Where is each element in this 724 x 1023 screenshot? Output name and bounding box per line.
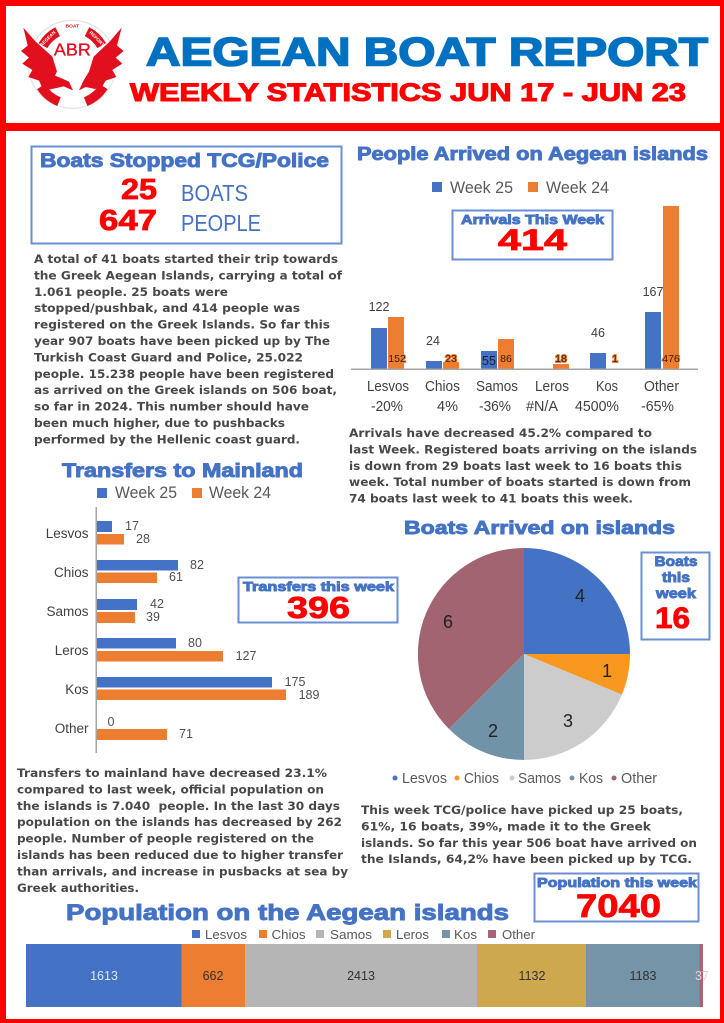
bar chart: people arrived: Samos [476, 379, 518, 395]
heading: population: Population on the Aegean islands [66, 900, 509, 925]
text block: trip summary: the Greek Aegean Islands, carrying a total of [34, 268, 343, 282]
legend [97, 484, 271, 502]
legend: Other [502, 928, 535, 942]
bar chart: transfers: 127 [236, 649, 256, 663]
icon: ABR logo [21, 20, 124, 108]
bar chart: transfers: 80 [188, 636, 202, 650]
legend: Kos [454, 928, 477, 942]
callout: boats this week: week [655, 585, 696, 601]
bar chart: people arrived [351, 178, 698, 415]
bar chart: transfers: Kos [65, 682, 89, 697]
bar chart: people arrived: 86 [500, 353, 512, 365]
stacked bar: population: 662 [203, 969, 223, 983]
bar chart: people arrived: -65% [641, 399, 674, 415]
text block: trip summary [34, 252, 343, 446]
subtitle: weekly statistics: WEEKLY STATISTICS JUN 17 - JUN 23 [130, 79, 686, 107]
callout: arrivals this week: Arrivals This Week [461, 212, 605, 227]
legend: Leros [396, 928, 429, 942]
bar chart: people arrived: Kos [596, 379, 618, 395]
callout: transfers this week [238, 578, 398, 625]
bar chart: transfers: 82 [190, 558, 204, 572]
text block: transfers summary: Greek authorities. [17, 881, 139, 895]
callout: transfers this week: Transfers this week [243, 579, 395, 594]
bar chart: people arrived: 23 [445, 353, 457, 365]
text block: pickups summary [361, 803, 697, 866]
bar chart: people arrived: 55 [482, 354, 496, 368]
text block: trip summary: as arrived on the Greek islands on 506 boat, [34, 383, 337, 397]
bar chart: transfers: 189 [299, 688, 319, 702]
bar chart: transfers: 42 [150, 597, 164, 611]
callout: transfers this week: 396 [287, 590, 350, 625]
text block: arrivals summary [349, 426, 697, 506]
icon: ABR logo: BOAT [65, 24, 79, 30]
legend: Chios [272, 928, 306, 942]
text block: transfers summary: compared to last week, official population on [17, 782, 324, 796]
text block: transfers summary: islands has been reduced due to higher transfer [17, 848, 343, 862]
pie chart: boats arrived: 1 [602, 661, 612, 681]
text block: transfers summary: than arrivals, and increase in pusbacks at sea by [17, 864, 349, 878]
legend [432, 178, 609, 197]
bar chart: people arrived: 4500% [575, 399, 619, 415]
bar chart: people arrived: Chios [425, 379, 460, 395]
legend [392, 771, 657, 787]
text block: arrivals summary: week. Total number of boats started is down from [349, 475, 691, 489]
bar chart: people arrived: -36% [479, 399, 511, 415]
legend: Week 25 [450, 178, 513, 197]
bar chart: transfers: 39 [146, 610, 160, 624]
stat: 25 boats: 25 [121, 174, 157, 206]
stacked bar: population: 1183 [630, 969, 656, 983]
bar chart: people arrived: 18 [555, 353, 567, 365]
stat: 25 boats [121, 174, 248, 206]
pie chart: boats arrived [392, 548, 657, 787]
bar chart: people arrived: 152 [388, 353, 406, 365]
icon: ABR logo: REPORT [88, 30, 106, 47]
text block: trip summary: year 907 boats have been picked up by The [34, 334, 330, 348]
bar chart: transfers: Leros [55, 643, 89, 658]
text block: trip summary: so far in 2024. This number should have [34, 400, 309, 414]
legend: Chios [464, 771, 499, 787]
callout: population this week [534, 874, 698, 924]
stacked bar: population [26, 928, 709, 1007]
bar chart: transfers [46, 484, 319, 753]
bar chart: people arrived: 122 [369, 300, 389, 314]
text block: trip summary: Turkish Coast Guard and Police, 25.022 [34, 350, 303, 364]
text block: trip summary: stopped/pushbak, and 414 people was [34, 301, 300, 315]
bar chart: transfers: 28 [136, 532, 150, 546]
callout: boats this week: 16 [655, 602, 690, 635]
heading: boats stopped: Boats Stopped TCG/Police [40, 151, 329, 172]
text block: arrivals summary: 74 boats last week to 41 boats this week. [349, 492, 633, 506]
bar chart: transfers: Other [55, 721, 89, 736]
text block: transfers summary: the islands is 7.040 people. In the last 30 days [17, 799, 340, 813]
bar chart: people arrived: #N/A [526, 399, 558, 415]
bar chart: transfers: 71 [179, 727, 193, 741]
pie chart: boats arrived: 4 [575, 586, 585, 606]
pie chart: boats arrived: 3 [563, 711, 573, 731]
bar chart: people arrived: 167 [643, 285, 663, 299]
bar chart: transfers: Chios [54, 565, 89, 580]
bar chart: people arrived: Other [644, 379, 679, 395]
bar chart: people arrived: Leros [535, 379, 569, 395]
legend: Samos [330, 928, 372, 942]
stacked bar: population: 37 [695, 969, 709, 983]
icon: ABR logo: AEGEAN [39, 29, 57, 47]
text block: pickups summary: islands. So far this year 506 boat have arrived on [361, 836, 697, 850]
heading: transfers to mainland: Transfers to Mainland [62, 461, 303, 482]
callout: arrivals this week [452, 210, 612, 260]
bar chart: people arrived: Lesvos [367, 379, 409, 395]
text block: trip summary: registered on the Greek Islands. So far this [34, 318, 330, 332]
bar chart: people arrived: -20% [371, 399, 403, 415]
callout: boats this week: Boats [654, 553, 698, 569]
bar chart: people arrived: 24 [426, 334, 440, 348]
text block: transfers summary: Transfers to mainland have decreased 23.1% [17, 766, 328, 780]
text block: arrivals summary: Arrivals have decreased 45.2% compared to [349, 426, 652, 440]
legend: Week 24 [209, 484, 271, 502]
legend: Kos [579, 771, 603, 787]
heading: boats arrived: Boats Arrived on islands [404, 517, 675, 538]
title: AEGEAN BOAT REPORT [146, 30, 708, 74]
bar chart: transfers: 61 [169, 570, 183, 584]
stat: 647 people: 647 [99, 205, 157, 237]
legend: Samos [518, 771, 561, 787]
pie chart: boats arrived: 6 [443, 612, 453, 632]
bar chart: transfers: 17 [125, 519, 139, 533]
legend: Week 24 [546, 178, 609, 197]
panel: boats stopped [32, 146, 342, 244]
stacked bar: population: 1613 [90, 969, 118, 983]
text block: pickups summary: 61%, 16 boats, 39%, made it to the Greek [361, 819, 651, 833]
pie chart: boats arrived: 2 [488, 721, 498, 741]
callout: boats this week: this [662, 569, 690, 585]
icon: ABR logo: ABR [54, 40, 91, 60]
heading: people arrived: People Arrived on Aegean islands [357, 144, 708, 164]
legend [192, 928, 535, 942]
text block: trip summary: people. 15.238 people have been registered [34, 367, 334, 381]
legend: Lesvos [205, 928, 247, 942]
text block: arrivals summary: is down from 29 boats last week to 16 boats this [349, 459, 682, 473]
stacked bar: population: 1132 [519, 969, 545, 983]
bar chart: people arrived: 46 [591, 326, 605, 340]
bar chart: people arrived: 4% [437, 399, 458, 415]
text block: pickups summary: This week TCG/police have picked up 25 boats, [361, 803, 683, 817]
bar chart: transfers: 0 [108, 715, 115, 729]
text block: transfers summary [17, 766, 349, 895]
bar chart: transfers: Samos [46, 604, 89, 619]
bar chart: people arrived: 476 [662, 353, 680, 365]
text block: transfers summary: population on the islands has decreased by 262 [17, 815, 342, 829]
callout: arrivals this week: 414 [498, 224, 567, 257]
text block: arrivals summary: last Week. Registered boats arriving on the islands [349, 442, 697, 456]
bar chart: people arrived: 1 [612, 353, 618, 365]
legend: Week 25 [115, 484, 177, 502]
text block: trip summary: been much higher, due to pushbacks [34, 416, 285, 430]
callout: population this week: 7040 [576, 888, 661, 924]
text block: pickups summary: the Islands, 64,2% have been picked up by TCG. [361, 852, 692, 866]
stat: 25 boats: BOATS [181, 180, 248, 206]
text block: trip summary: performed by the Hellenic coast guard. [34, 432, 300, 446]
callout: boats this week [642, 552, 710, 640]
stacked bar: population: 2413 [347, 969, 375, 983]
text block: trip summary: A total of 41 boats started their trip towards [34, 252, 338, 266]
bar chart: transfers: Lesvos [46, 526, 89, 541]
text block: transfers summary: people. Number of people registered on the [17, 832, 314, 846]
legend: Other [621, 771, 657, 787]
callout: population this week: Population this week [537, 875, 698, 890]
legend: Lesvos [402, 771, 447, 787]
stat: 647 people [99, 205, 261, 237]
text block: trip summary: 1.061 people. 25 boats were [34, 285, 228, 299]
bar chart: transfers: 175 [285, 675, 305, 689]
stat: 647 people: PEOPLE [181, 210, 261, 236]
